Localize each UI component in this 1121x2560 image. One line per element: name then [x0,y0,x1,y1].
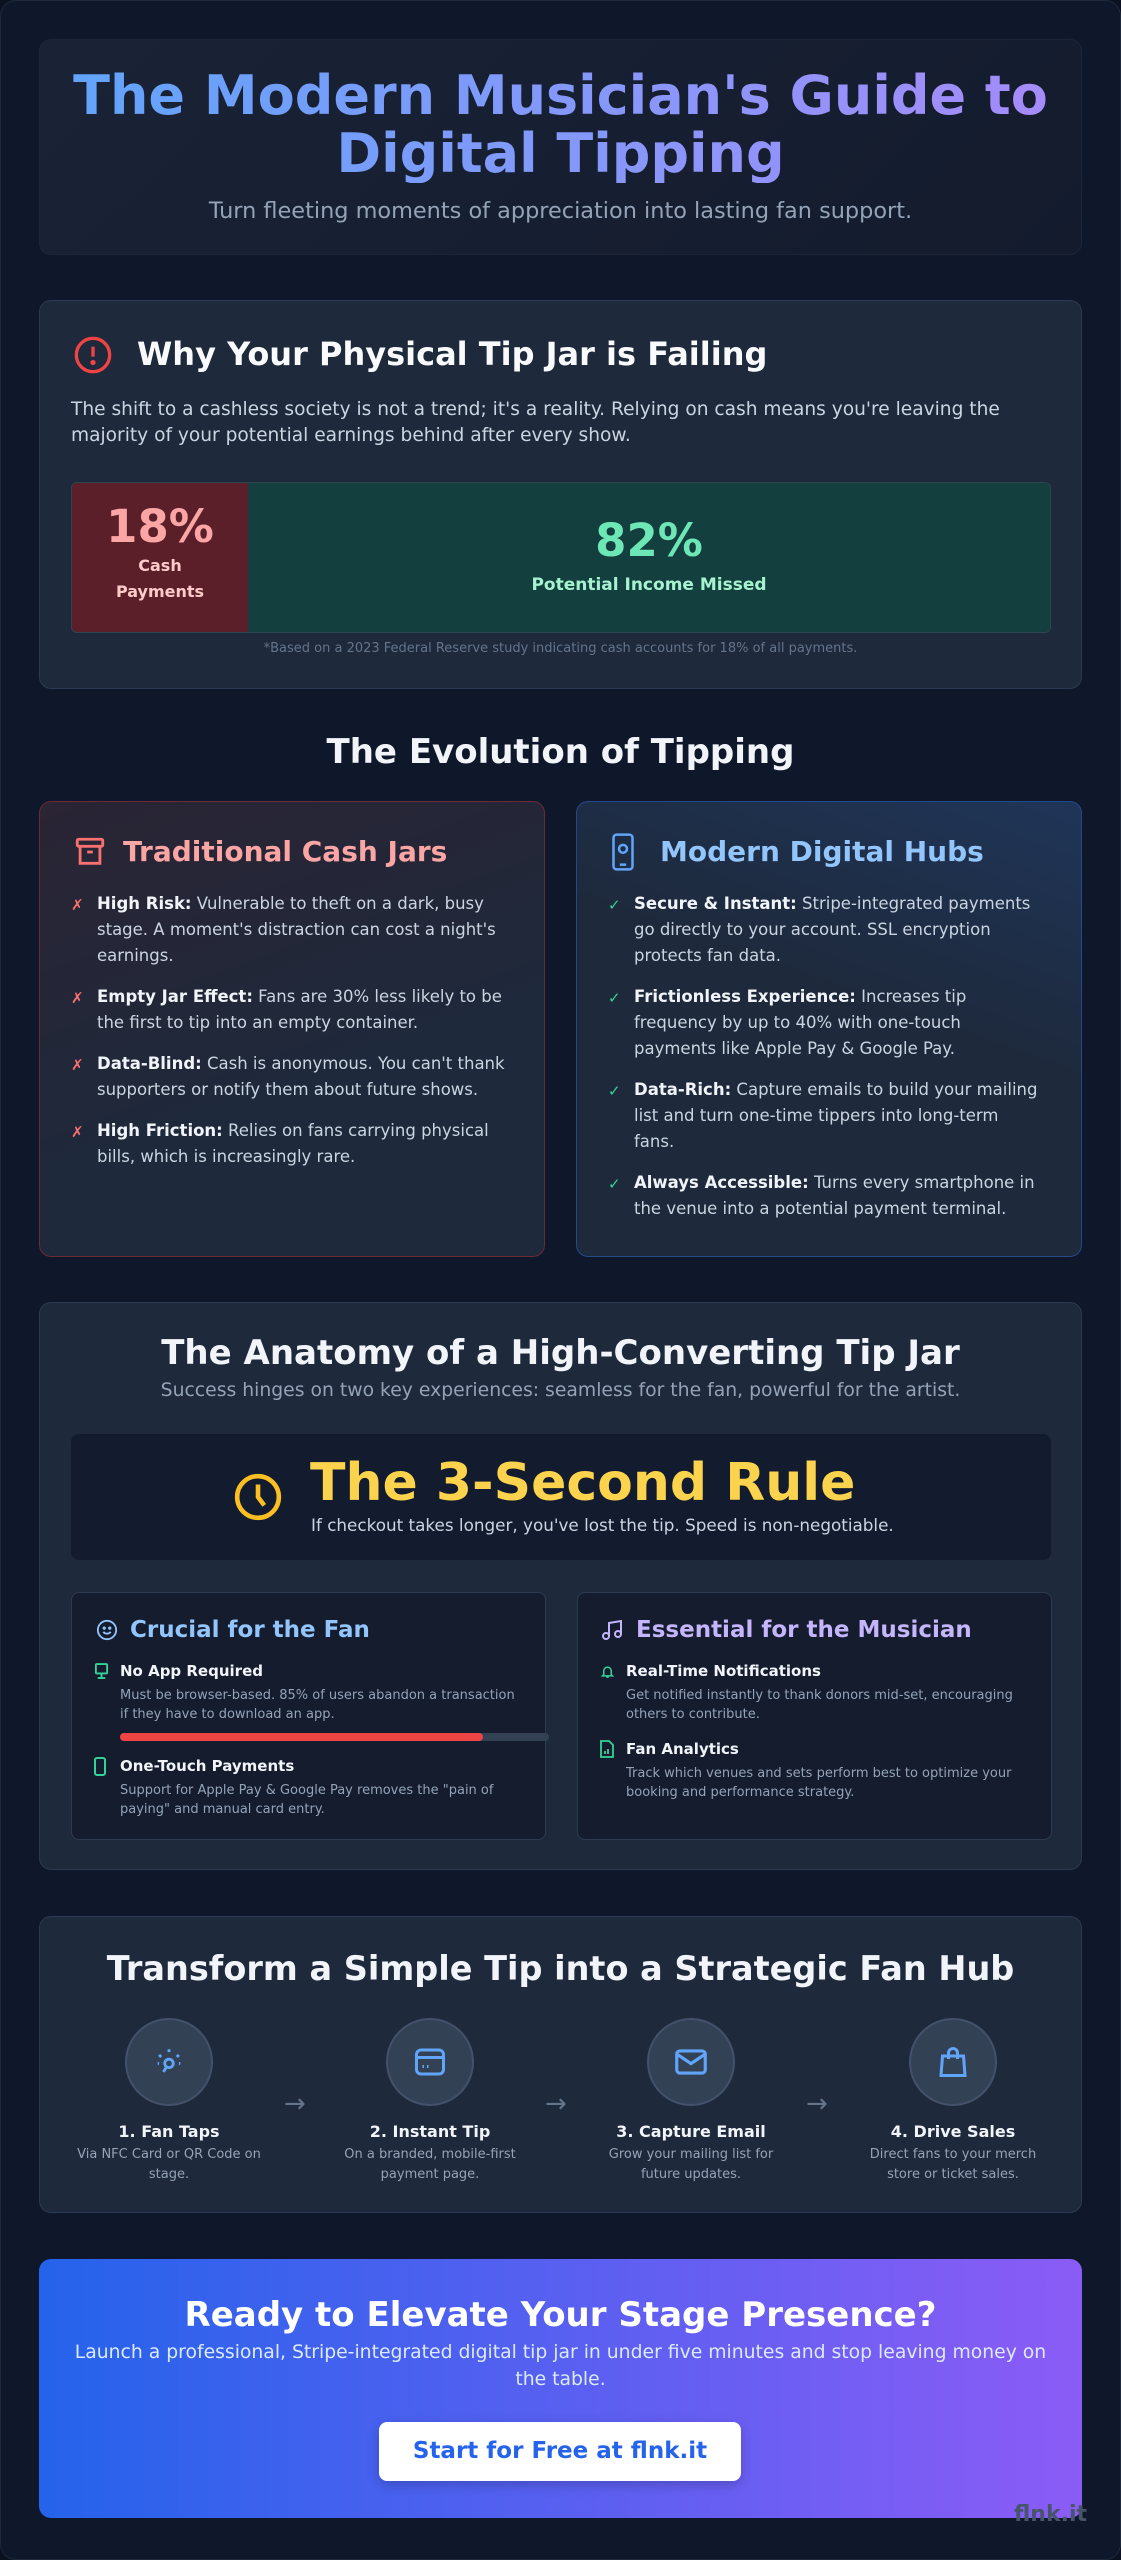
list [71,894,505,1166]
panel: traditional cash jars: ✗ [71,1056,84,1074]
heading: Crucial for the Fan [130,1617,370,1643]
panel: modern digital hubs: ✓ [608,1082,621,1100]
panel: modern digital hubs [576,801,1082,1257]
list: High Friction: Relies on fans carrying physical bills, which is increasingly rare. [97,1121,489,1166]
heading: Transform a Simple Tip into a Strategic Fan Hub [107,1949,1014,1988]
subtitle: Turn fleeting moments of appreciation into lasting fan support. [209,198,912,224]
panel: traditional cash jars: ✗ [71,989,84,1007]
watermark: flnk.it [1014,2502,1087,2527]
footnote: *Based on a 2023 Federal Reserve study indicating cash accounts for 18% of all payments. [264,641,857,656]
subheading: Success hinges on two key experiences: seamless for the fan, powerful for the artist. [161,1380,960,1401]
icon: clock [234,1474,282,1520]
item: no app [94,1662,515,1722]
panel: modern digital hubs: ✓ [608,989,621,1007]
step 1: Via NFC Card or QR Code on stage. [77,2147,261,2182]
button: Start for Free at flnk.it [413,2438,707,2464]
stat bar [71,482,1051,633]
panel: strategic fan hub [39,1916,1082,2213]
item: no app: No App Required [120,1662,263,1680]
CTA heading: Ready to Elevate Your Stage Presence? [185,2295,936,2335]
panel: modern digital hubs: ✓ [608,1175,621,1193]
cash segment [72,483,248,632]
list: Empty Jar Effect: Fans are 30% less likely to be the first to tip into an empty container. [97,987,502,1032]
cash segment: Payments [116,582,204,601]
item: notifications: Real-Time Notifications [626,1662,821,1680]
CTA panel [39,2259,1082,2518]
item: one-touch [94,1757,494,1817]
step 4: 4. Drive Sales [891,2122,1015,2141]
rule title: The 3-Second Rule [310,1453,855,1513]
title: The Modern Musician's Guide to [73,64,1048,127]
panel: why tip jar failing [39,300,1082,689]
icon: phone [612,833,634,871]
card heading: Traditional Cash Jars [123,835,447,868]
missed segment: Potential Income Missed [531,575,767,595]
item: notifications [600,1662,1013,1722]
heading: Essential for the Musician [636,1617,972,1643]
heading: evolution: The Evolution of Tipping [327,732,794,772]
step 3: 3. Capture Email [616,2122,766,2141]
heading: Why Your Physical Tip Jar is Failing [137,335,767,373]
CTA text: Launch a professional, Stripe-integrated digital tip jar in under five minutes and stop leaving money on the table. [75,2342,1046,2390]
arrow: → [545,2089,567,2119]
callout: 3-second rule [71,1434,1051,1560]
list: Data-Blind: Cash is anonymous. You can't thank supporters or notify them about future shows. [97,1054,505,1099]
arrow: → [806,2089,828,2119]
card heading: Modern Digital Hubs [660,835,984,868]
panel: crucial for fan [71,1592,546,1840]
title [40,67,1081,183]
panel: traditional cash jars: ✗ [71,1123,84,1141]
header card [39,39,1082,255]
item: analytics: Fan Analytics [626,1740,739,1758]
step 4 [870,2018,1036,2182]
list: High Risk: Vulnerable to theft on a dark, busy stage. A moment's distraction can cost a night's earnings. [97,894,496,965]
list: Data-Rich: Capture emails to build your mailing list and turn one-time tippers into long-term [634,1080,1037,1125]
paragraph: The shift to a cashless society is not a trend; it's a reality. Relying on cash means you're leaving the majority of your potential earnings behind after every show. [71,399,1000,446]
item: notifications: Get notified instantly to thank donors mid-set, encouraging others to contribute. [626,1688,1013,1722]
item: one-touch: One-Touch Payments [120,1757,294,1775]
arrow: → [284,2089,306,2119]
panel: essential for musician [577,1592,1052,1840]
step 3 [609,2018,774,2182]
step 1 [77,2018,261,2182]
panel: anatomy [39,1302,1082,1870]
cash segment: 18% [106,500,214,553]
panel: traditional cash jars [39,801,545,1257]
item: analytics: Track which venues and sets perform best to optimize your booking and performance strategy. [626,1766,1011,1800]
panel: modern digital hubs: ✓ [608,896,621,914]
title: Digital Tipping [336,122,785,185]
step 2 [344,2018,516,2182]
heading: The Anatomy of a High-Converting Tip Jar [161,1333,960,1373]
icon: smile [96,1620,118,1640]
list: Secure & Instant: Stripe-integrated payments go directly to your account. SSL encryption protects fan data. [634,894,1030,965]
missed segment [248,483,1050,632]
icon: archive [76,838,104,865]
step 3: Grow your mailing list for future updates. [609,2147,773,2182]
bar: 85% [120,1733,549,1741]
rule text: If checkout takes longer, you've lost the tip. Speed is non-negotiable. [311,1515,894,1535]
button [379,2422,741,2481]
icon: alert [74,336,112,374]
item: analytics [600,1740,1012,1800]
list [608,894,1037,1218]
step 2: On a branded, mobile-first payment page. [344,2147,516,2182]
list: fans. [634,1132,674,1151]
step 1: 1. Fan Taps [118,2122,220,2141]
item: one-touch: Support for Apple Pay & Google Pay removes the "pain of paying" and manual card entry. [120,1783,493,1817]
step 4: Direct fans to your merch store or ticket sales. [870,2147,1036,2182]
list: Frictionless Experience: Increases tip frequency by up to 40% with one-touch payments like Apple Pay & Google Pay. [634,987,966,1058]
icon: music note [602,1620,622,1640]
list: Always Accessible: Turns every smartphone in the venue into a potential payment terminal. [634,1173,1035,1218]
panel: traditional cash jars: ✗ [71,896,84,914]
step 2: 2. Instant Tip [370,2122,490,2141]
cash segment: Cash [138,556,182,575]
missed segment: 82% [595,514,703,567]
item: no app: Must be browser-based. 85% of users abandon a transaction if they have to download an app. [120,1688,515,1722]
